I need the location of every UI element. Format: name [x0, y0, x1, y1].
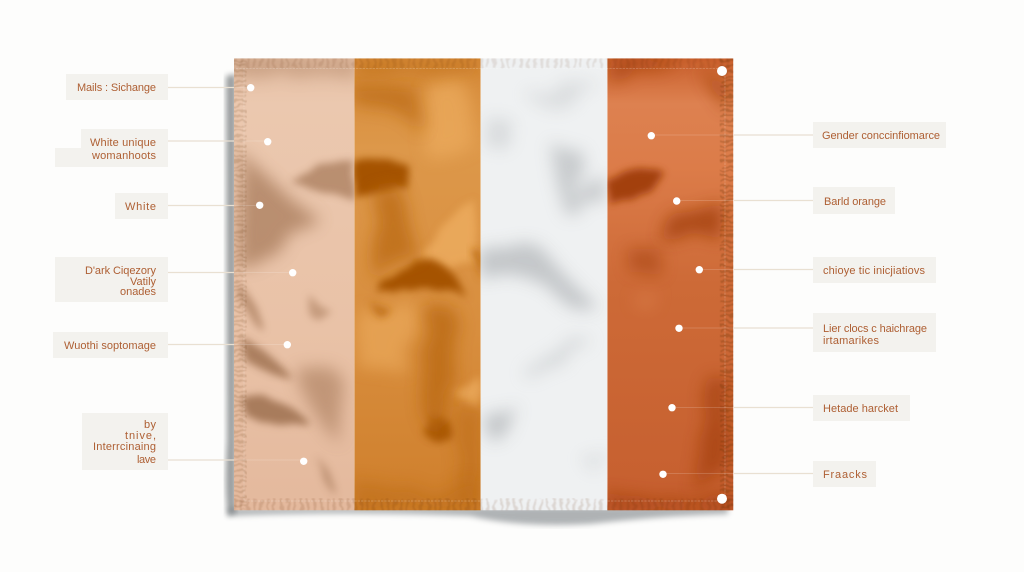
- striped fabric flag: [230, 55, 737, 513]
- right label: Hetade harcket: [676, 395, 910, 421]
- left label: by tnive Interrcinaing lave: [82, 413, 300, 470]
- left label: Dark Cipezory Vatily onades: [55, 257, 290, 302]
- left label: Dark Cipezory Vatily onades: onades: [120, 286, 156, 298]
- right label: Lier clocs chaichrage irtamarikes: Lier clocs c haichrage: [823, 323, 927, 335]
- right label: Fraacks: [666, 461, 876, 487]
- stripe: peach: [234, 58, 354, 510]
- left label: Wuothi soptomage: [53, 332, 285, 358]
- left label: Dark Cipezory Vatily onades: D'ark Ciqezory: [85, 265, 156, 277]
- flag shadow: [226, 74, 728, 525]
- stripe: burnt orange: [607, 58, 733, 510]
- left label: Mails Sichange: Mails : Sichange: [77, 82, 156, 94]
- right label: Lier clocs chaichrage irtamarikes: [683, 313, 936, 352]
- right label: Gender concinfiomarce: Gender conccinfiomarce: [822, 130, 940, 142]
- left label: White: White: [125, 201, 156, 213]
- stripe: white: [481, 58, 607, 510]
- left label: by tnive Interrcinaing lave: lave: [137, 454, 156, 466]
- left label: White: [115, 193, 256, 219]
- left label: Mails Sichange: [66, 74, 250, 100]
- hem ruffles: [230, 55, 737, 513]
- left label: by tnive Interrcinaing lave: Interrcinaing: [93, 441, 156, 453]
- right label: chioye tic inicjiatiovs: [703, 257, 936, 283]
- right label: chioye tic inicjiatiovs: chioye tic inicjiatiovs: [823, 265, 926, 277]
- left label: by tnive Interrcinaing lave: tnive,: [125, 430, 156, 442]
- left label: Wuothi soptomage: Wuothi soptomage: [64, 340, 156, 352]
- right label: Gender concinfiomarce: [655, 122, 946, 148]
- left label: White unique womanhoots: womanhoots: [91, 150, 156, 162]
- right label: Hetade harcket: Hetade harcket: [823, 403, 898, 415]
- right label: Lier clocs chaichrage irtamarikes: irtamarikes: [823, 335, 880, 347]
- marker dots: [247, 66, 727, 504]
- right label: Fraacks: Fraacks: [823, 469, 868, 481]
- right label: Bard orange: [680, 187, 895, 214]
- left label: White unique womanhoots: [55, 129, 265, 167]
- stitching: [236, 68, 725, 501]
- left label: Dark Cipezory Vatily onades: Vatily: [130, 276, 156, 288]
- left label: White unique womanhoots: White unique: [90, 137, 156, 149]
- right label: Bard orange: Barld orange: [824, 196, 886, 208]
- left label: by tnive Interrcinaing lave: by: [144, 419, 156, 431]
- stripe: orange: [354, 58, 481, 510]
